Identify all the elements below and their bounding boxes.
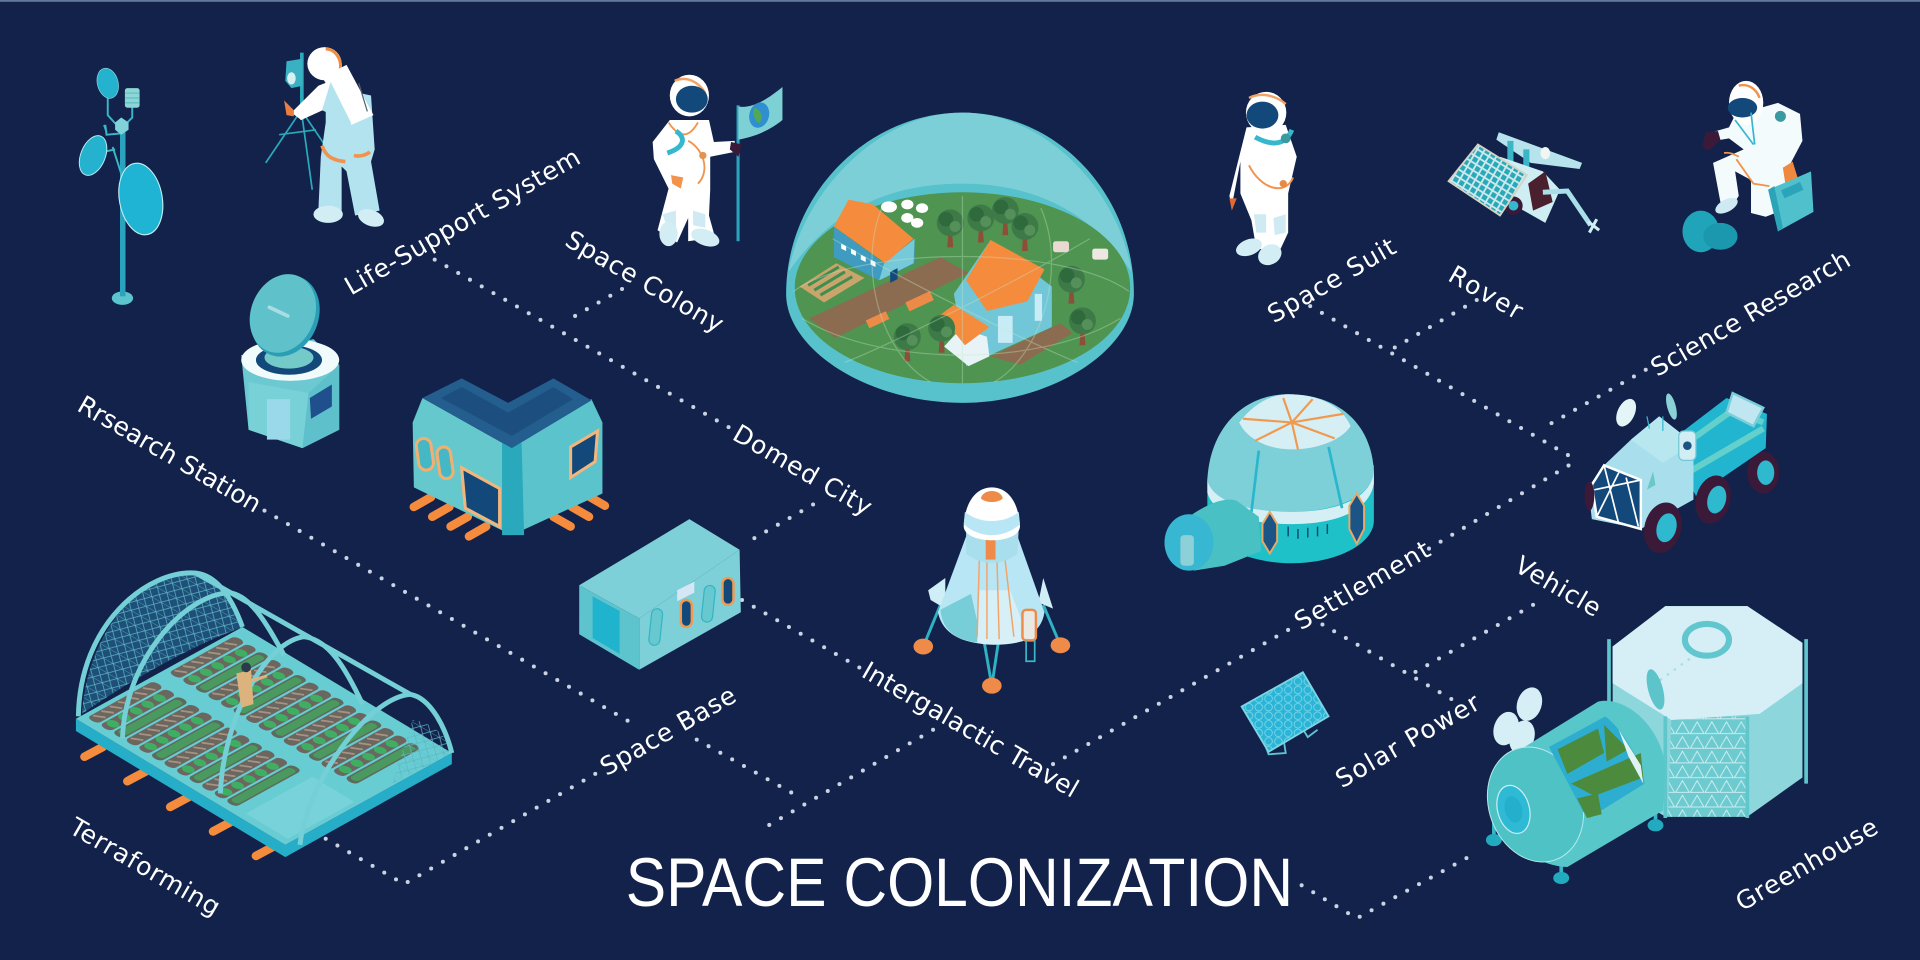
label: Space Base: Space Base	[595, 680, 741, 782]
title: SPACE COLONIZATION	[626, 844, 1293, 921]
label: Solar Power: Solar Power	[1330, 688, 1485, 794]
label: Settlement: Settlement	[1289, 535, 1435, 636]
support legs	[1486, 808, 1663, 884]
label: Space Colony: Space Colony	[561, 225, 729, 339]
icon: astronaut space suit	[1229, 92, 1297, 269]
label: Greenhouse: Greenhouse	[1731, 812, 1883, 917]
house	[940, 240, 1052, 366]
icon: space base module	[579, 519, 741, 670]
icon: settlement dome	[1164, 394, 1374, 571]
icon: solar panel	[1242, 672, 1329, 754]
storage tank	[1609, 606, 1806, 818]
label: Space Suit: Space Suit	[1262, 232, 1401, 329]
icon: lunar vehicle	[1584, 392, 1779, 557]
icon: astronaut with surveying tripod	[266, 47, 386, 230]
label: Terraforming: Terraforming	[64, 812, 225, 922]
icon: kneeling researcher	[1682, 81, 1813, 252]
icon: domed city	[786, 113, 1134, 403]
label: Domed City: Domed City	[728, 419, 877, 522]
label: Vehicle: Vehicle	[1510, 550, 1606, 623]
barrel arches	[78, 573, 452, 845]
label: Science Research: Science Research	[1646, 245, 1855, 382]
garden plot	[800, 263, 864, 302]
roads	[809, 257, 1073, 365]
label: Life-Support System: Life-Support System	[339, 142, 585, 301]
icon: solar rover	[1449, 132, 1599, 233]
icon: greenhouse dome terraforming	[76, 573, 452, 857]
icon: radar station	[238, 264, 339, 448]
animals	[866, 200, 1108, 328]
label: Rrsearch Station: Rrsearch Station	[73, 390, 266, 519]
barn	[834, 200, 915, 283]
dotted connector lines	[264, 260, 1646, 918]
label: Rover: Rover	[1444, 260, 1529, 326]
icon: modular habitat building	[413, 378, 605, 536]
cylinder module	[1472, 701, 1665, 876]
fans	[1489, 684, 1546, 757]
icon: greenhouse habitat	[1472, 606, 1806, 884]
gardener	[236, 662, 267, 708]
icon: antenna mast	[74, 66, 168, 305]
icon: astronaut with flag	[653, 75, 782, 250]
grow beds	[87, 636, 436, 839]
end mesh	[392, 720, 452, 784]
icon: rocket	[913, 487, 1070, 694]
trees	[894, 197, 1096, 361]
label: Intergalactic Travel: Intergalactic Travel	[857, 656, 1084, 804]
